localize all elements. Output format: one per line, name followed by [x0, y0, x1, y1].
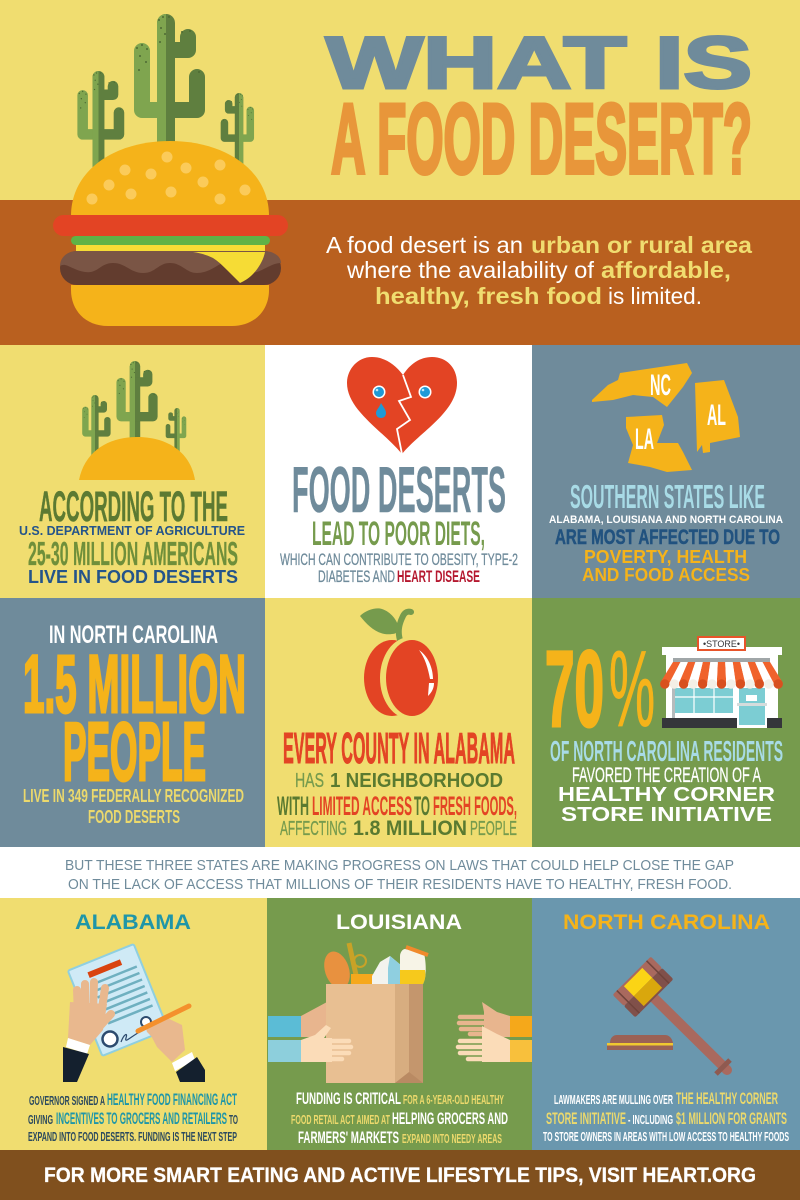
- panel text: U.S. DEPARTMENT OF AGRICULTURE: [19, 523, 245, 538]
- infographic canvas: 25-30 MILLION AMERICANS: [28, 535, 238, 572]
- panel text: [549, 478, 783, 585]
- panel text: LAWMAKERS ARE MULLING OVER: [554, 1092, 673, 1107]
- text block: progress banner: [65, 857, 734, 893]
- panel text: [280, 453, 518, 586]
- infographic canvas: ACCORDING TO THE: [39, 483, 228, 531]
- panel text: [291, 1089, 508, 1147]
- panel text: AND FOOD ACCESS: [582, 565, 750, 585]
- panel text: INCENTIVES TO GROCERS AND RETAILERS: [56, 1109, 227, 1128]
- panel text: FOOD RETAIL ACT AIMED AT: [291, 1112, 390, 1127]
- text block: definition: affordable,: [601, 257, 731, 283]
- panel: 25-30 million Americans: [19, 361, 245, 587]
- footer: FOR MORE SMART EATING AND ACTIVE LIFESTYLE TIPS, VISIT HEART.ORG: [44, 1164, 756, 1187]
- text block: definition: is limited.: [608, 283, 702, 309]
- text block: definition: healthy, fresh food: [375, 283, 602, 309]
- panel text: HEALTHY CORNER: [558, 784, 776, 806]
- text block: definition: where the availability of: [346, 257, 595, 283]
- panel text: POVERTY, HEALTH: [584, 547, 747, 567]
- panel text: 1 NEIGHBORHOOD: [330, 770, 503, 792]
- panel text: EXPAND INTO NEEDY AREAS: [402, 1131, 502, 1146]
- panel text: AFFECTING: [280, 818, 347, 840]
- panel text: GIVING: [28, 1112, 53, 1127]
- panel text: FUNDING IS CRITICAL: [296, 1089, 401, 1108]
- text block: definition: urban or rural area: [531, 232, 752, 258]
- title: [326, 23, 752, 194]
- stat: 70%: 70: [545, 628, 604, 749]
- panel: southern states: [549, 363, 783, 585]
- panel text: HAS: [295, 770, 324, 792]
- panel text: HELPING GROCERS AND: [392, 1109, 508, 1128]
- icon: gavel: [607, 957, 730, 1074]
- panel: 1.5 million people: [23, 621, 246, 827]
- panel: 70 percent: %: [609, 628, 655, 749]
- panel: 1.5 million people: FOOD DESERTS: [88, 807, 180, 827]
- icon: state maps: LA: [635, 423, 654, 456]
- infographic canvas: 1.5 MILLION: [23, 639, 246, 730]
- panel text: FARMERS' MARKETS: [298, 1128, 399, 1147]
- text block: definition: [326, 232, 752, 309]
- icon: corner store: [660, 637, 783, 728]
- heading: NORTH CAROLINA: [563, 911, 770, 934]
- panel: Alabama: [28, 911, 238, 1144]
- panel: 1.5 million people: LIVE IN 349 FEDERALLY RECOGNIZED: [23, 786, 244, 806]
- panel text: [543, 1089, 789, 1144]
- panel text: LIMITED ACCESS: [312, 791, 412, 821]
- panel text: [19, 483, 245, 587]
- panel text: - INCLUDING: [628, 1112, 673, 1127]
- icon: burger: [53, 141, 288, 326]
- panel text: WITH: [277, 791, 309, 821]
- icon: grocery bag and hands: [268, 943, 532, 1083]
- panel text: [550, 736, 783, 826]
- panel text: LIVE IN FOOD DESERTS: [28, 567, 238, 587]
- icon: state maps: AL: [707, 399, 726, 432]
- icon: signing document: [63, 944, 205, 1082]
- panel: every county in Alabama: [277, 608, 517, 840]
- panel text: STORE INITIATIVE: [561, 804, 772, 826]
- icon: state maps: [592, 363, 740, 472]
- heading: LOUISIANA: [336, 911, 462, 934]
- panel text: TO: [414, 791, 430, 821]
- icon: crying broken heart: [347, 357, 457, 454]
- panel text: ALABAMA, LOUISIANA AND NORTH CAROLINA: [549, 514, 783, 526]
- panel text: 1.8 MILLION: [353, 817, 467, 840]
- icon: corner store: •STORE•: [703, 639, 740, 650]
- icon: cacti on sand dune: [79, 361, 195, 480]
- panel text: EXPAND INTO FOOD DESERTS. FUNDING IS THE NEXT STEP: [28, 1129, 237, 1144]
- title: WHAT IS: [326, 23, 752, 104]
- panel: poor diets: [280, 357, 518, 586]
- infographic canvas: HEALTHY FOOD FINANCING ACT: [107, 1090, 237, 1109]
- infographic canvas: FRESH FOODS,: [433, 791, 517, 821]
- panel text: GOVERNOR SIGNED A: [29, 1093, 105, 1108]
- panel: 70 percent: [545, 628, 783, 826]
- panel: Louisiana: [268, 911, 532, 1147]
- infographic canvas: FOOD DESERTS: [292, 453, 506, 526]
- panel text: FOR A 6-YEAR-OLD HEALTHY: [403, 1092, 504, 1107]
- panel text: HEART DISEASE: [397, 567, 480, 586]
- panel: 1.5 million people: IN NORTH CAROLINA: [49, 621, 218, 649]
- text block: definition: A food desert is an: [326, 232, 523, 258]
- text block: progress banner: BUT THESE THREE STATES ARE MAKING PROGRESS ON LAWS THAT COULD HELP CLOSE THE GAP: [65, 857, 734, 874]
- panel: 1.5 million people: PEOPLE: [63, 705, 206, 798]
- panel text: TO: [229, 1112, 238, 1127]
- panel: North Carolina: [543, 911, 789, 1144]
- panel text: DIABETES AND: [318, 567, 395, 586]
- icon: peach: [360, 608, 440, 719]
- text block: progress banner: ON THE LACK OF ACCESS THAT MILLIONS OF THEIR RESIDENTS HAVE TO HEALTHY, FRESH FOOD.: [68, 876, 732, 893]
- icon: state maps: NC: [650, 369, 671, 402]
- panel text: STORE INITIATIVE: [546, 1109, 626, 1128]
- panel text: WHICH CAN CONTRIBUTE TO OBESITY, TYPE-2: [280, 550, 518, 569]
- panel text: [28, 1090, 238, 1144]
- panel text: LEAD TO POOR DIETS,: [312, 515, 485, 553]
- panel text: PEOPLE: [470, 818, 517, 840]
- panel text: [277, 724, 517, 840]
- icon: cacti behind burger: [79, 14, 253, 184]
- heading: ALABAMA: [75, 911, 191, 934]
